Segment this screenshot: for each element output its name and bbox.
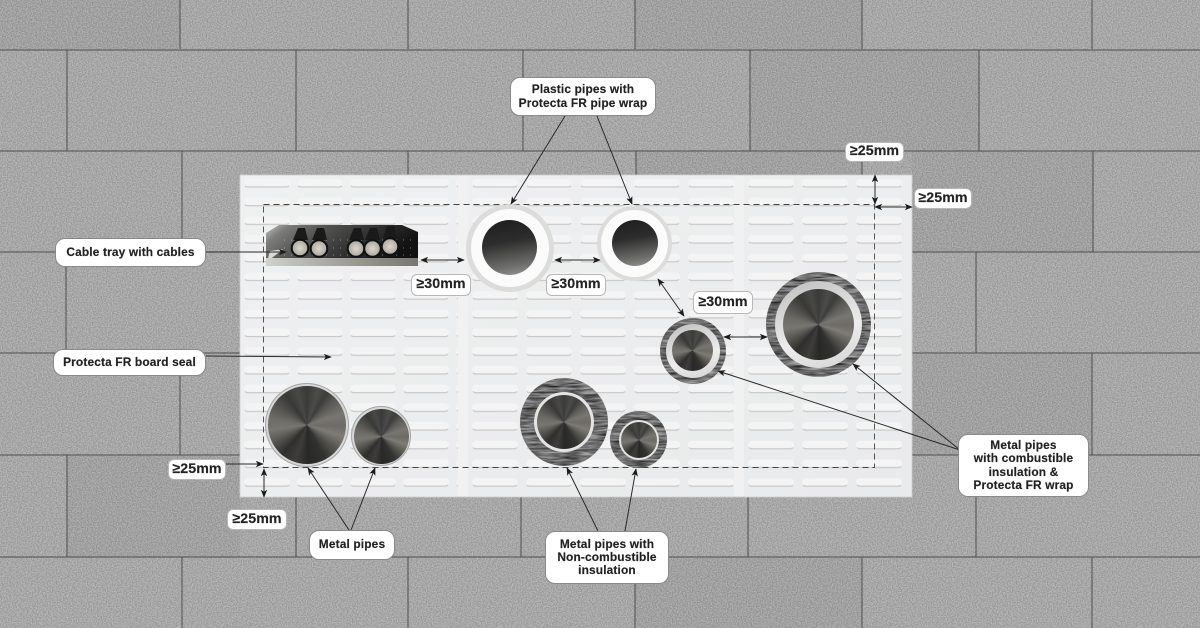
metal pipe, large — [265, 383, 349, 467]
callout: combustible insulation and wrap — [958, 434, 1089, 497]
dimension: tray to pipe: ≥30mm — [416, 276, 466, 292]
callout: combustible insulation and wrap: Protecta FR wrap — [973, 478, 1074, 492]
dimension: bottom margin — [227, 509, 287, 530]
callout: non-combustible insulation: insulation — [578, 563, 636, 577]
callout: combustible insulation and wrap: insulation & — [989, 464, 1058, 478]
plastic pipe with wrap, large — [466, 204, 554, 292]
callout: cable tray — [55, 238, 206, 267]
callout: cable tray: Cable tray with cables — [66, 245, 195, 259]
plastic pipe with wrap, small — [597, 206, 672, 281]
callout: metal pipes: Metal pipes — [319, 537, 385, 551]
dimension: insulated pipes — [693, 291, 753, 314]
metal pipe with non-combustible insulation, large — [520, 378, 608, 466]
callout: combustible insulation and wrap: Metal pipes — [990, 438, 1057, 452]
callout: plastic pipes: Protecta FR pipe wrap — [519, 96, 647, 110]
callout: metal pipes — [309, 530, 395, 560]
callout: board seal — [53, 349, 206, 376]
callout: non-combustible insulation — [545, 531, 669, 584]
dimension: right margin — [914, 188, 972, 209]
dimension: tray to pipe — [411, 274, 471, 296]
callout: combustible insulation and wrap: with combustible — [974, 451, 1073, 465]
callout: plastic pipes: Plastic pipes with — [532, 82, 634, 96]
callout: board seal: Protecta FR board seal — [63, 355, 196, 369]
dimension: top margin: ≥25mm — [850, 143, 899, 159]
dimension: insulated pipes: ≥30mm — [698, 294, 748, 310]
callout: plastic pipes — [510, 77, 656, 116]
dimension: pipe to pipe — [546, 274, 606, 296]
callout: non-combustible insulation: Metal pipes with — [560, 537, 654, 551]
dimension: bottom margin: ≥25mm — [232, 511, 282, 527]
dimension: left margin: ≥25mm — [172, 461, 222, 477]
metal pipe with combustible insulation and wrap, small — [660, 318, 726, 384]
dimension: right margin: ≥25mm — [918, 190, 968, 206]
metal pipe with combustible insulation and wrap, large — [766, 272, 871, 377]
metal pipe with non-combustible insulation, small — [610, 411, 667, 468]
dimension: left margin — [168, 459, 226, 480]
callout: non-combustible insulation: Non-combustible — [557, 550, 657, 564]
metal pipe, small — [351, 406, 411, 466]
dimension: top margin — [845, 142, 904, 162]
dimension: pipe to pipe: ≥30mm — [551, 276, 601, 292]
